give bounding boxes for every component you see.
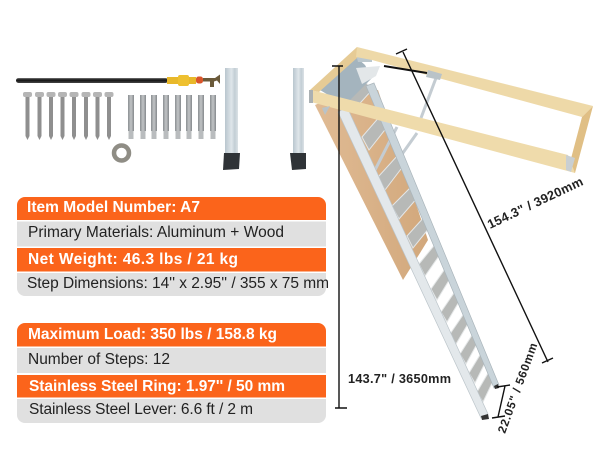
ladder steps — [343, 80, 494, 402]
panel: specifications two: Maximum Load: 350 lbs / 158.8 kg — [28, 326, 277, 343]
support arms — [375, 78, 436, 170]
ladder feet — [481, 414, 489, 420]
hinge plate — [320, 56, 372, 105]
plywood door panel — [315, 90, 428, 280]
screws — [23, 92, 114, 140]
anchor sleeves — [128, 95, 216, 139]
panel: specifications one: Primary Materials: Aluminum + Wood — [28, 224, 284, 241]
attic ladder illustration — [309, 47, 593, 420]
icon: stainless steel ring — [114, 146, 129, 160]
strut — [384, 66, 427, 73]
right rail — [366, 83, 499, 388]
wood frame — [310, 47, 357, 92]
label: length: 154.3" / 3920mm — [485, 174, 585, 232]
panel: specifications one: Net Weight: 46.3 lbs / 21 kg — [28, 251, 238, 268]
panel: specifications two — [17, 323, 326, 423]
panel: specifications one: Item Model Number: A7 — [27, 199, 200, 216]
panel: specifications two: Stainless Steel Lever: 6.6 ft / 2 m — [29, 401, 253, 418]
dimension: step spacing — [492, 385, 510, 418]
panel: specifications two: Stainless Steel Ring: 1.97'' / 50 mm — [29, 378, 285, 395]
telescopic leg left — [223, 68, 240, 170]
dimension: vertical height — [332, 66, 347, 408]
panel: specifications two: Number of Steps: 12 — [28, 351, 170, 368]
panel: specifications one: Step Dimensions: 14'' x 2.95'' / 355 x 75 mm — [27, 275, 329, 292]
left rail — [338, 107, 488, 418]
hardware plates — [309, 90, 313, 103]
panel: specifications one — [17, 197, 329, 296]
label: step spacing: 22.05" / 560mm — [496, 341, 540, 435]
label: height: 143.7" / 3650mm — [348, 372, 451, 386]
telescopic leg right — [290, 68, 306, 170]
lever pole — [16, 74, 220, 87]
dimension: diagonal length — [396, 49, 553, 363]
